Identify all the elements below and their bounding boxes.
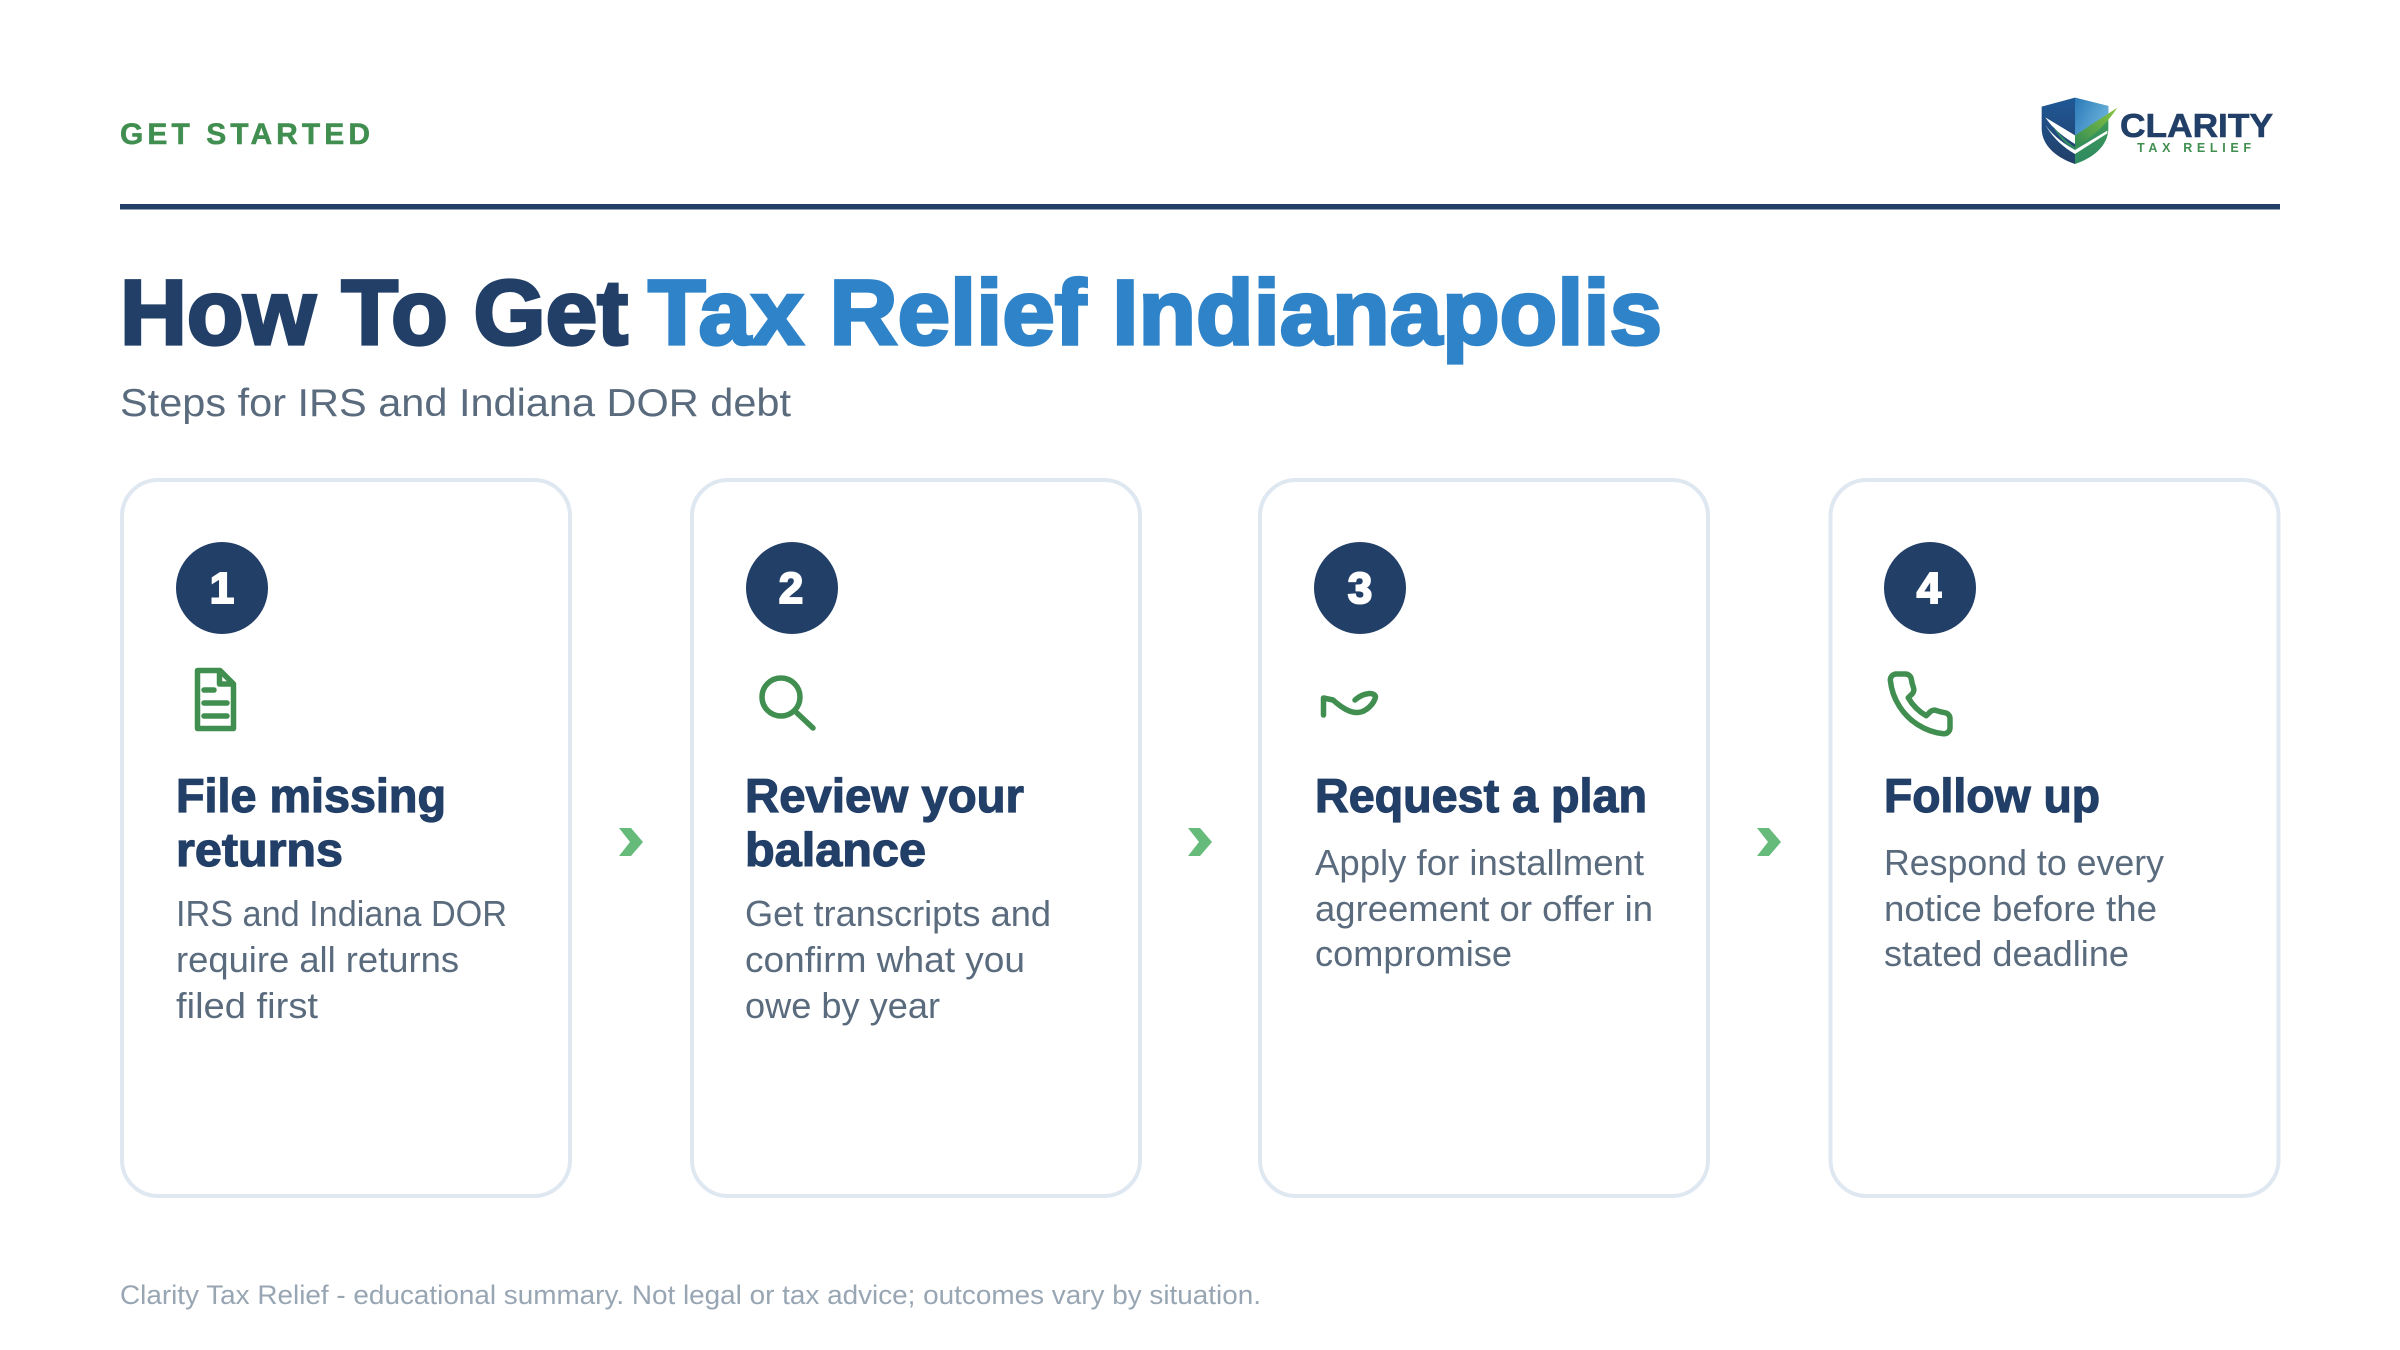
icon: document (198, 670, 234, 728)
step 3 text: agreement or offer in (1315, 888, 1653, 929)
number badge 4: 4 (1917, 564, 1942, 613)
step 1 heading (176, 769, 446, 876)
arrow 3 to 4 (1757, 828, 1781, 856)
footer disclaimer: Clarity Tax Relief - educational summary. Not legal or tax advice; outcomes vary by situation. (120, 1280, 1261, 1310)
step 1 heading: returns (176, 823, 343, 876)
title: How To Get (120, 262, 628, 364)
step 2 text: owe by year (745, 985, 940, 1026)
step 3 heading: Request a plan (1315, 769, 1647, 822)
step 1 text: require all returns (176, 939, 459, 980)
number badge 3: 3 (1348, 564, 1372, 613)
step 1 text (176, 893, 507, 1026)
step 4 text (1884, 842, 2164, 974)
number badge 2 (746, 542, 838, 634)
number badge 1 (176, 542, 268, 634)
logo tagline: TAX RELIEF (2137, 141, 2251, 155)
number badge 4 (1884, 542, 1976, 634)
step 2 text: confirm what you (745, 939, 1025, 980)
step 4 heading: Follow up (1884, 769, 2100, 822)
step 2 heading (745, 769, 1024, 876)
step 2 heading: Review your (745, 769, 1024, 822)
logo wordmark: CLARITY (2120, 107, 2273, 144)
arrow 1 to 2 (619, 828, 643, 856)
arrow 2 to 3 (1188, 828, 1212, 856)
panel: step 3 (1260, 480, 1708, 1196)
icon: handshake (1324, 694, 1376, 715)
logo: Clarity Tax Relief (2042, 98, 2273, 164)
step 2 text (745, 893, 1051, 1026)
step 3 text: Apply for installment (1315, 842, 1644, 883)
eyebrow: get started: GET STARTED (120, 118, 370, 151)
logo icon: shield with check (2042, 98, 2117, 164)
panel: step 4 (1830, 480, 2278, 1196)
title: Tax Relief Indianapolis (648, 262, 1662, 364)
panel: step 2 (692, 480, 1140, 1196)
number badge 2: 2 (779, 564, 803, 613)
panel: step 1 (122, 480, 570, 1196)
step 1 text: filed first (176, 985, 318, 1026)
step 1 text: IRS and Indiana DOR (176, 893, 507, 934)
step 1 heading: File missing (176, 769, 446, 822)
subtitle: Steps for IRS and Indiana DOR debt (120, 382, 791, 425)
icon: phone (1890, 674, 1950, 734)
step 3 text: compromise (1315, 933, 1512, 974)
step 4 text: Respond to every (1884, 842, 2164, 883)
step 2 text: Get transcripts and (745, 893, 1051, 934)
step 4 text: notice before the (1884, 888, 2157, 929)
number badge 3 (1314, 542, 1406, 634)
step 2 heading: balance (745, 823, 926, 876)
header rule (120, 204, 2280, 210)
number badge 1: 1 (210, 564, 234, 613)
step 4 text: stated deadline (1884, 933, 2129, 974)
icon: magnifying glass (762, 678, 813, 728)
title (120, 262, 1662, 364)
step 3 text (1315, 842, 1653, 974)
